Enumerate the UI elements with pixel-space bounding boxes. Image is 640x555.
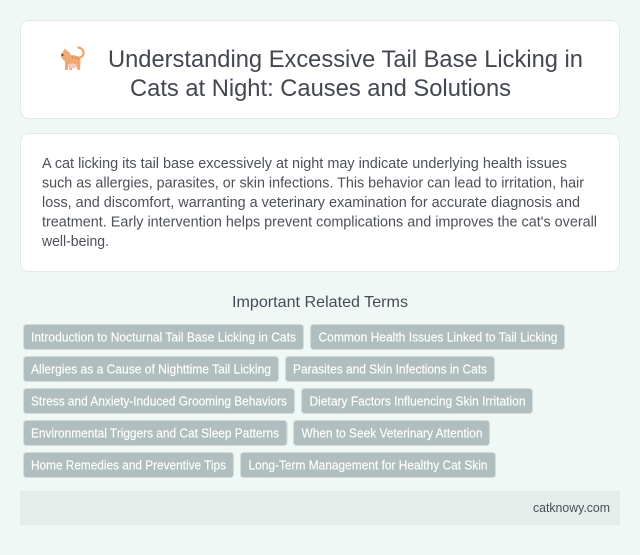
tag: stress and anxiety: Stress and Anxiety-Induced Grooming Behaviors — [31, 394, 287, 408]
description text: A cat licking its tail base excessively at night may indicate underlying health issues — [42, 155, 567, 172]
tag: allergies — [24, 356, 278, 382]
tag: environmental triggers — [24, 420, 287, 446]
tag: allergies: Allergies as a Cause of Nighttime Tail Licking — [31, 362, 271, 376]
tag: long-term management: Long-Term Management for Healthy Cat Skin — [248, 458, 488, 472]
tag: long-term management — [240, 452, 496, 478]
title text: Cats at Night: Causes and Solutions — [130, 75, 511, 102]
panel: title card — [20, 20, 620, 118]
footer source text: catknowy.com — [533, 500, 610, 515]
tag: home remedies — [24, 452, 234, 478]
tag: introduction: Introduction to Nocturnal Tail Base Licking in Cats — [31, 330, 296, 344]
description text: treatment. Early intervention helps prevent complications and improves the cat's overall — [42, 214, 597, 230]
panel: description card — [20, 134, 620, 272]
tag: parasites: Parasites and Skin Infections in Cats — [293, 362, 487, 376]
icon: cat — [61, 48, 84, 70]
tag: dietary factors — [302, 388, 532, 414]
tag: veterinary attention — [294, 420, 490, 446]
tag: common health issues: Common Health Issues Linked to Tail Licking — [318, 330, 558, 344]
heading: important related terms: Important Related Terms — [232, 294, 408, 311]
tag: introduction — [24, 324, 304, 350]
tag: environmental triggers: Environmental Triggers and Cat Sleep Patterns — [31, 426, 279, 440]
footer — [20, 491, 620, 525]
tag: common health issues — [310, 324, 564, 350]
panel: related term tags — [24, 324, 564, 478]
description text — [41, 155, 597, 250]
tag: dietary factors: Dietary Factors Influencing Skin Irritation — [310, 394, 526, 408]
tag: veterinary attention: When to Seek Veterinary Attention — [302, 426, 482, 440]
title text: Understanding Excessive Tail Base Licking in — [108, 46, 583, 73]
description text: well-being. — [41, 233, 109, 250]
tag: stress and anxiety — [24, 388, 294, 414]
tag: parasites — [286, 356, 494, 382]
title text — [108, 46, 583, 102]
description text: such as allergies, parasites, or skin infections. This behavior can lead to irritation, hair — [42, 174, 584, 192]
tag: home remedies: Home Remedies and Preventive Tips — [31, 458, 226, 472]
description text: loss, and discomfort, warranting a veterinary examination for accurate diagnosis and — [42, 194, 580, 211]
